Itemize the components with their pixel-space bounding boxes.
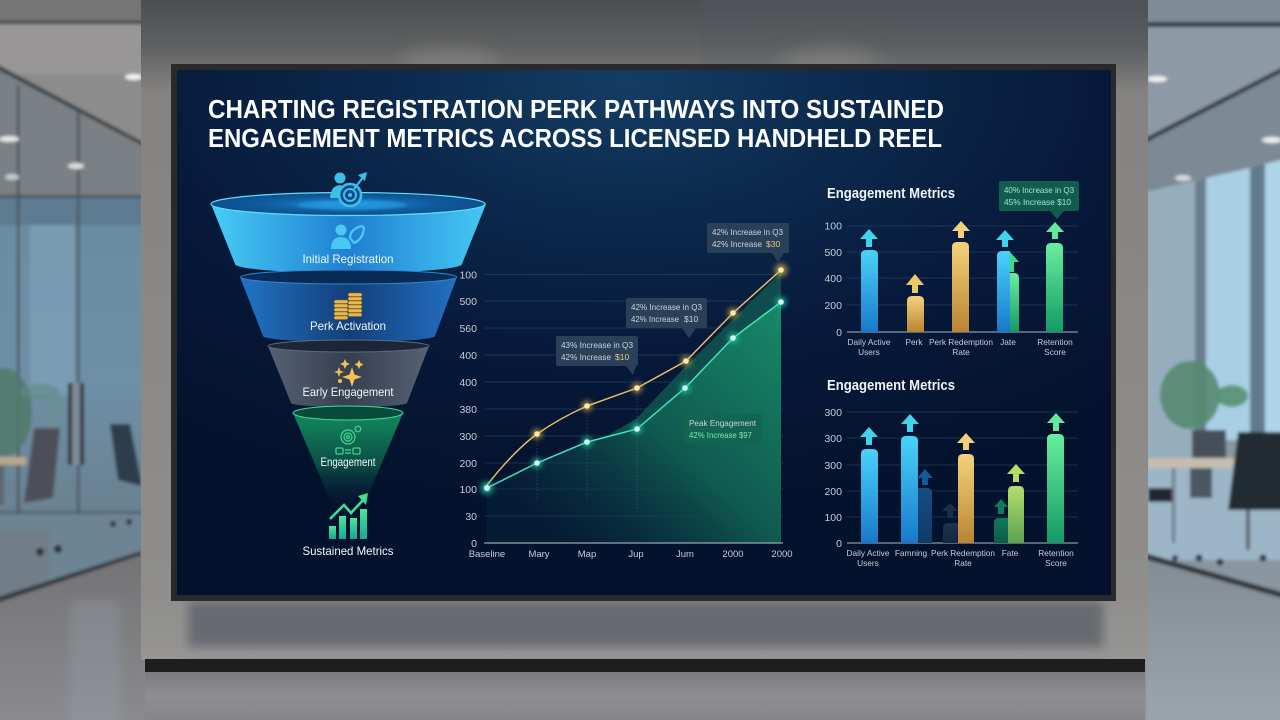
up arrows [860,413,1065,518]
funnel stage: perk activation [240,270,457,342]
y axis grid and labels: 100 [459,270,477,282]
title [208,94,944,153]
teal line series [481,297,786,494]
x axis labels: 2000 [771,549,793,560]
bar labels: Users [857,558,879,568]
bar labels: Perk [905,337,923,347]
bar labels: Score [1044,347,1066,357]
bar labels: Perk Redemption [929,337,993,347]
floor in front of wall [145,672,1145,720]
grid and axis: 100 [824,512,842,524]
funnel [211,172,486,558]
up arrows [860,221,1064,293]
bar labels [848,337,1073,357]
bar labels: Retention [1038,548,1074,558]
callout: middle [626,298,707,338]
bar labels: Score [1045,558,1067,568]
grid and axis: 300 [824,407,842,419]
x axis labels: Map [578,549,596,560]
x axis labels: Jup [628,549,644,560]
grid and axis: 0 [836,538,842,550]
x axis labels: Baseline [469,549,505,560]
funnel stage: initial registration [211,192,486,273]
funnel stage: engagement: Engagement [320,455,376,469]
bar labels: Jate [1000,337,1016,347]
grid and axis: 400 [824,273,842,285]
y axis grid and labels: 30 [465,511,477,523]
grid and axis [824,407,1078,550]
grid and axis: 100 [824,220,842,232]
bar labels: Perk Redemption [931,548,995,558]
icon: sustained metrics growth chart [329,493,368,539]
x axis labels: Jum [676,549,694,560]
callout: top right: 42% Increase [712,239,762,249]
callout: middle: 42% Increase [631,314,679,324]
callout: lower: 42% Increase [561,352,611,362]
line chart [459,223,793,560]
grid and axis: 300 [824,433,842,445]
callout: top bar chart: 40% Increase in Q3 [1004,185,1074,195]
feature wall [141,0,1148,672]
x axis labels: 2000 [722,549,744,560]
grid and axis: 200 [824,486,842,498]
bars [861,434,1064,543]
title: ENGAGEMENT METRICS ACROSS LICENSED HANDHELD REEL [208,123,942,153]
grid and axis: 300 [824,460,842,472]
grid and axis [824,220,1078,339]
icon: person and rocket [331,224,364,249]
grid and axis: 200 [824,300,842,312]
callout: lower: 43% Increase in Q3 [561,340,633,350]
callout: lower [556,336,638,375]
gold line series [487,264,787,485]
bar labels: Users [858,347,880,357]
display screen [171,64,1116,601]
callout: middle: 42% Increase in Q3 [631,302,702,312]
bar chart: top engagement metrics [824,181,1079,357]
y axis grid and labels: 560 [459,323,477,335]
icon: target and devices [336,426,361,454]
icon: coins [334,293,362,320]
bar labels: Famning [895,548,928,558]
bar labels: Rate [954,558,972,568]
grid and axis: 0 [836,327,842,339]
y axis grid and labels [459,270,783,550]
bar labels [847,548,1074,568]
funnel stage: perk activation: Perk Activation [310,319,386,333]
callout: lower: $10 [615,352,629,362]
bar labels: Retention [1037,337,1073,347]
funnel label: sustained metrics: Sustained Metrics [302,544,394,558]
callout: peak engagement [684,414,762,443]
funnel stage: initial registration: Initial Registration [302,252,394,266]
funnel stage: early engagement: Early Engagement [302,385,394,399]
bar labels: Rate [952,347,970,357]
callout: top right: 42% Increase in Q3 [712,227,783,237]
funnel stage: engagement [293,406,403,507]
bar labels: Daily Active [847,548,890,558]
icon: person with target and arrow [330,172,367,206]
grid and axis: 500 [824,247,842,259]
y axis grid and labels: 300 [459,431,477,443]
bars [861,242,1063,332]
upper shaded area [600,272,781,440]
x axis [484,542,783,544]
chart heading: Engagement Metrics [827,377,955,394]
callout: top bar chart: 45% Increase $10 [1004,197,1071,207]
icon: sparkles [334,359,364,387]
bar labels: Fate [1002,548,1019,558]
bar labels: Daily Active [848,337,891,347]
y axis grid and labels: 0 [471,538,477,550]
x axis labels: Mary [528,549,550,560]
y axis grid and labels: 500 [459,296,477,308]
callout: top bar chart [999,181,1079,219]
title: CHARTING REGISTRATION PERK PATHWAYS INTO SUSTAINED [208,94,944,124]
lower shaded area [487,302,781,543]
callout: middle: $10 [684,314,698,324]
callout: top right: $30 [766,239,780,249]
x axis labels [469,549,793,560]
bar chart: bottom engagement metrics [824,377,1078,568]
callout: peak engagement: 42% Increase $97 [689,430,752,440]
callout: peak engagement: Peak Engagement [689,418,757,428]
funnel stage: early engagement [268,340,429,407]
y axis grid and labels: 200 [459,458,477,470]
callout: top right [707,223,789,262]
y axis grid and labels: 100 [459,484,477,496]
y axis grid and labels: 400 [459,350,477,362]
chart heading: Engagement Metrics [827,185,955,202]
drop lines [537,361,686,510]
y axis grid and labels: 380 [459,404,477,416]
y axis grid and labels: 400 [459,377,477,389]
